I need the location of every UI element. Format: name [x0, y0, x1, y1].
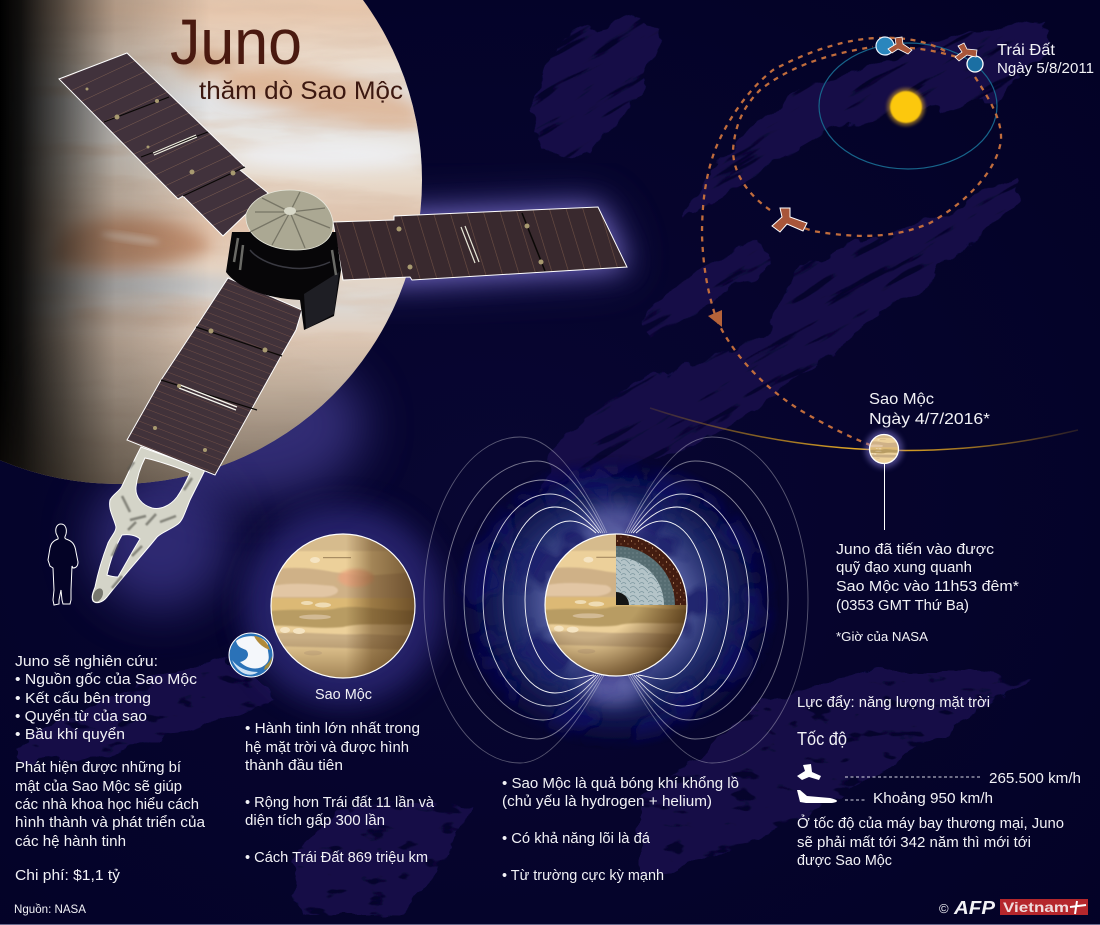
Earth [229, 633, 273, 677]
solar system trajectory diagram [702, 37, 1001, 445]
plane icon [797, 790, 837, 803]
probe icon 2 [955, 43, 977, 61]
Juno mission goals text: Juno sẽ nghiên cứu: [15, 653, 158, 670]
magnetic glow [451, 454, 781, 750]
Jupiter orbit arc [650, 408, 1078, 450]
solar panel lower [127, 278, 302, 475]
human silhouette scale [48, 524, 78, 605]
Juno mission goals text: mật của Sao Mộc sẽ giúp [15, 778, 182, 795]
orbit insertion note: *Giờ của NASA [836, 629, 928, 644]
commercial speed note: được Sao Mộc [797, 852, 892, 869]
commercial speed note: sẽ phải mất tới 342 năm thì mới tới [797, 834, 1031, 851]
interior cutaway [616, 534, 687, 605]
source: Nguồn: NASA [14, 904, 86, 916]
arrowhead [708, 310, 722, 327]
Jupiter magnetosphere and interior [424, 437, 808, 763]
solar panel upper left [59, 53, 268, 236]
background brush texture lower [15, 657, 1030, 915]
Jupiter facts text: • Hành tinh lớn nhất trong [245, 720, 420, 737]
probe speed value: 265.500 km/h [989, 770, 1081, 787]
Jupiter arrival label: Sao Mộc [869, 391, 934, 408]
Juno mission goals text: Chi phí: $1,1 tỷ [15, 867, 121, 884]
Juno mission goals text: Phát hiện được những bí [15, 759, 182, 776]
Earth start [876, 37, 983, 72]
Jupiter facts text: diện tích gấp 300 lần [245, 812, 385, 829]
plane speed leader [845, 799, 865, 801]
Juno mission goals text: các nhà khoa học hiểu cách [15, 796, 199, 813]
Vietnam+ logo [1000, 899, 1088, 915]
commercial speed note [797, 814, 1064, 869]
propulsion and speed block [797, 695, 1081, 869]
Juno outer trajectory [702, 38, 945, 445]
probe speed leader [845, 776, 982, 778]
dish cover [246, 190, 333, 250]
Jupiter and Earth size comparison [229, 506, 443, 706]
probe icon 3 [772, 208, 807, 232]
Jupiter composition text: • Có khả năng lõi là đá [502, 830, 651, 847]
Jupiter composition text: • Từ trường cực kỳ mạnh [502, 867, 664, 884]
Earth launch label: Trái Đất [997, 42, 1056, 59]
Earth launch label [997, 42, 1094, 77]
probe icon 1 [888, 37, 912, 54]
Jupiter large photo [0, 0, 430, 490]
label: Sao Mộc [315, 686, 372, 703]
field lines [424, 437, 808, 763]
Juno mission goals text: hình thành và phát triển của [15, 814, 206, 831]
Jupiter arrival label: Ngày 4/7/2016* [869, 411, 990, 428]
Juno mission goals text: • Nguồn gốc của Sao Mộc [15, 671, 198, 688]
propulsion: Lực đẩy: năng lượng mặt trời [797, 695, 990, 711]
speed heading: Tốc độ [797, 729, 847, 749]
Vietnam+ logo: Vietnam [1003, 899, 1069, 915]
Earth launch label: Ngày 5/8/2011 [997, 61, 1094, 77]
Juno spacecraft [59, 53, 627, 603]
background brush texture upper [324, 0, 1100, 714]
commercial speed note: Ở tốc độ của máy bay thương mại, Juno [797, 814, 1064, 832]
plane speed value: Khoảng 950 km/h [873, 790, 993, 807]
Jupiter composition text: (chủ yếu là hydrogen + helium) [502, 793, 712, 810]
orbit insertion note [836, 541, 1019, 644]
Juno mission goals text: các hệ hành tinh [15, 833, 126, 850]
Jupiter arrival marker [865, 430, 903, 530]
magnetometer boom [91, 447, 205, 603]
title [170, 6, 403, 105]
orbit insertion note: quỹ đạo xung quanh [836, 559, 972, 576]
glow behind spacecraft [90, 207, 627, 610]
Jupiter facts text: • Cách Trái Đất 869 triệu km [245, 849, 428, 866]
Earth orbit [819, 43, 997, 169]
orbit insertion note: Juno đã tiến vào được [836, 541, 995, 558]
Juno mission goals text: • Kết cấu bên trong [15, 690, 151, 707]
Juno inner trajectory [733, 47, 1001, 236]
Jupiter composition text [502, 775, 739, 884]
Jupiter facts text: • Rộng hơn Trái đất 11 lần và [245, 794, 435, 811]
Juno mission goals text: • Quyển từ của sao [15, 708, 147, 725]
solar panel right [333, 207, 627, 280]
Juno mission goals text: • Bầu khí quyển [15, 726, 125, 743]
subtitle: thăm dò Sao Mộc [199, 77, 403, 105]
title: Juno: Juno [170, 6, 302, 78]
Jupiter facts text: thành đầu tiên [245, 757, 343, 774]
Jupiter medium [268, 531, 418, 678]
Jupiter arrival label [869, 391, 990, 428]
probe speed icon [797, 764, 821, 780]
AFP logo: AFP [953, 898, 996, 918]
orbit insertion note: Sao Mộc vào 11h53 đêm* [836, 578, 1019, 595]
Jupiter facts text: hệ mặt trời và được hình [245, 739, 409, 756]
spacecraft body [226, 190, 341, 330]
credits [939, 898, 1088, 918]
Jupiter facts text [245, 720, 435, 866]
credits: © [939, 901, 949, 916]
Jupiter planet with cutaway [542, 531, 690, 676]
Juno mission goals text [15, 653, 206, 884]
Sun [887, 88, 925, 126]
orbit insertion note: (0353 GMT Thứ Ba) [836, 597, 969, 614]
Jupiter composition text: • Sao Mộc là quả bóng khí khổng lồ [502, 775, 739, 792]
